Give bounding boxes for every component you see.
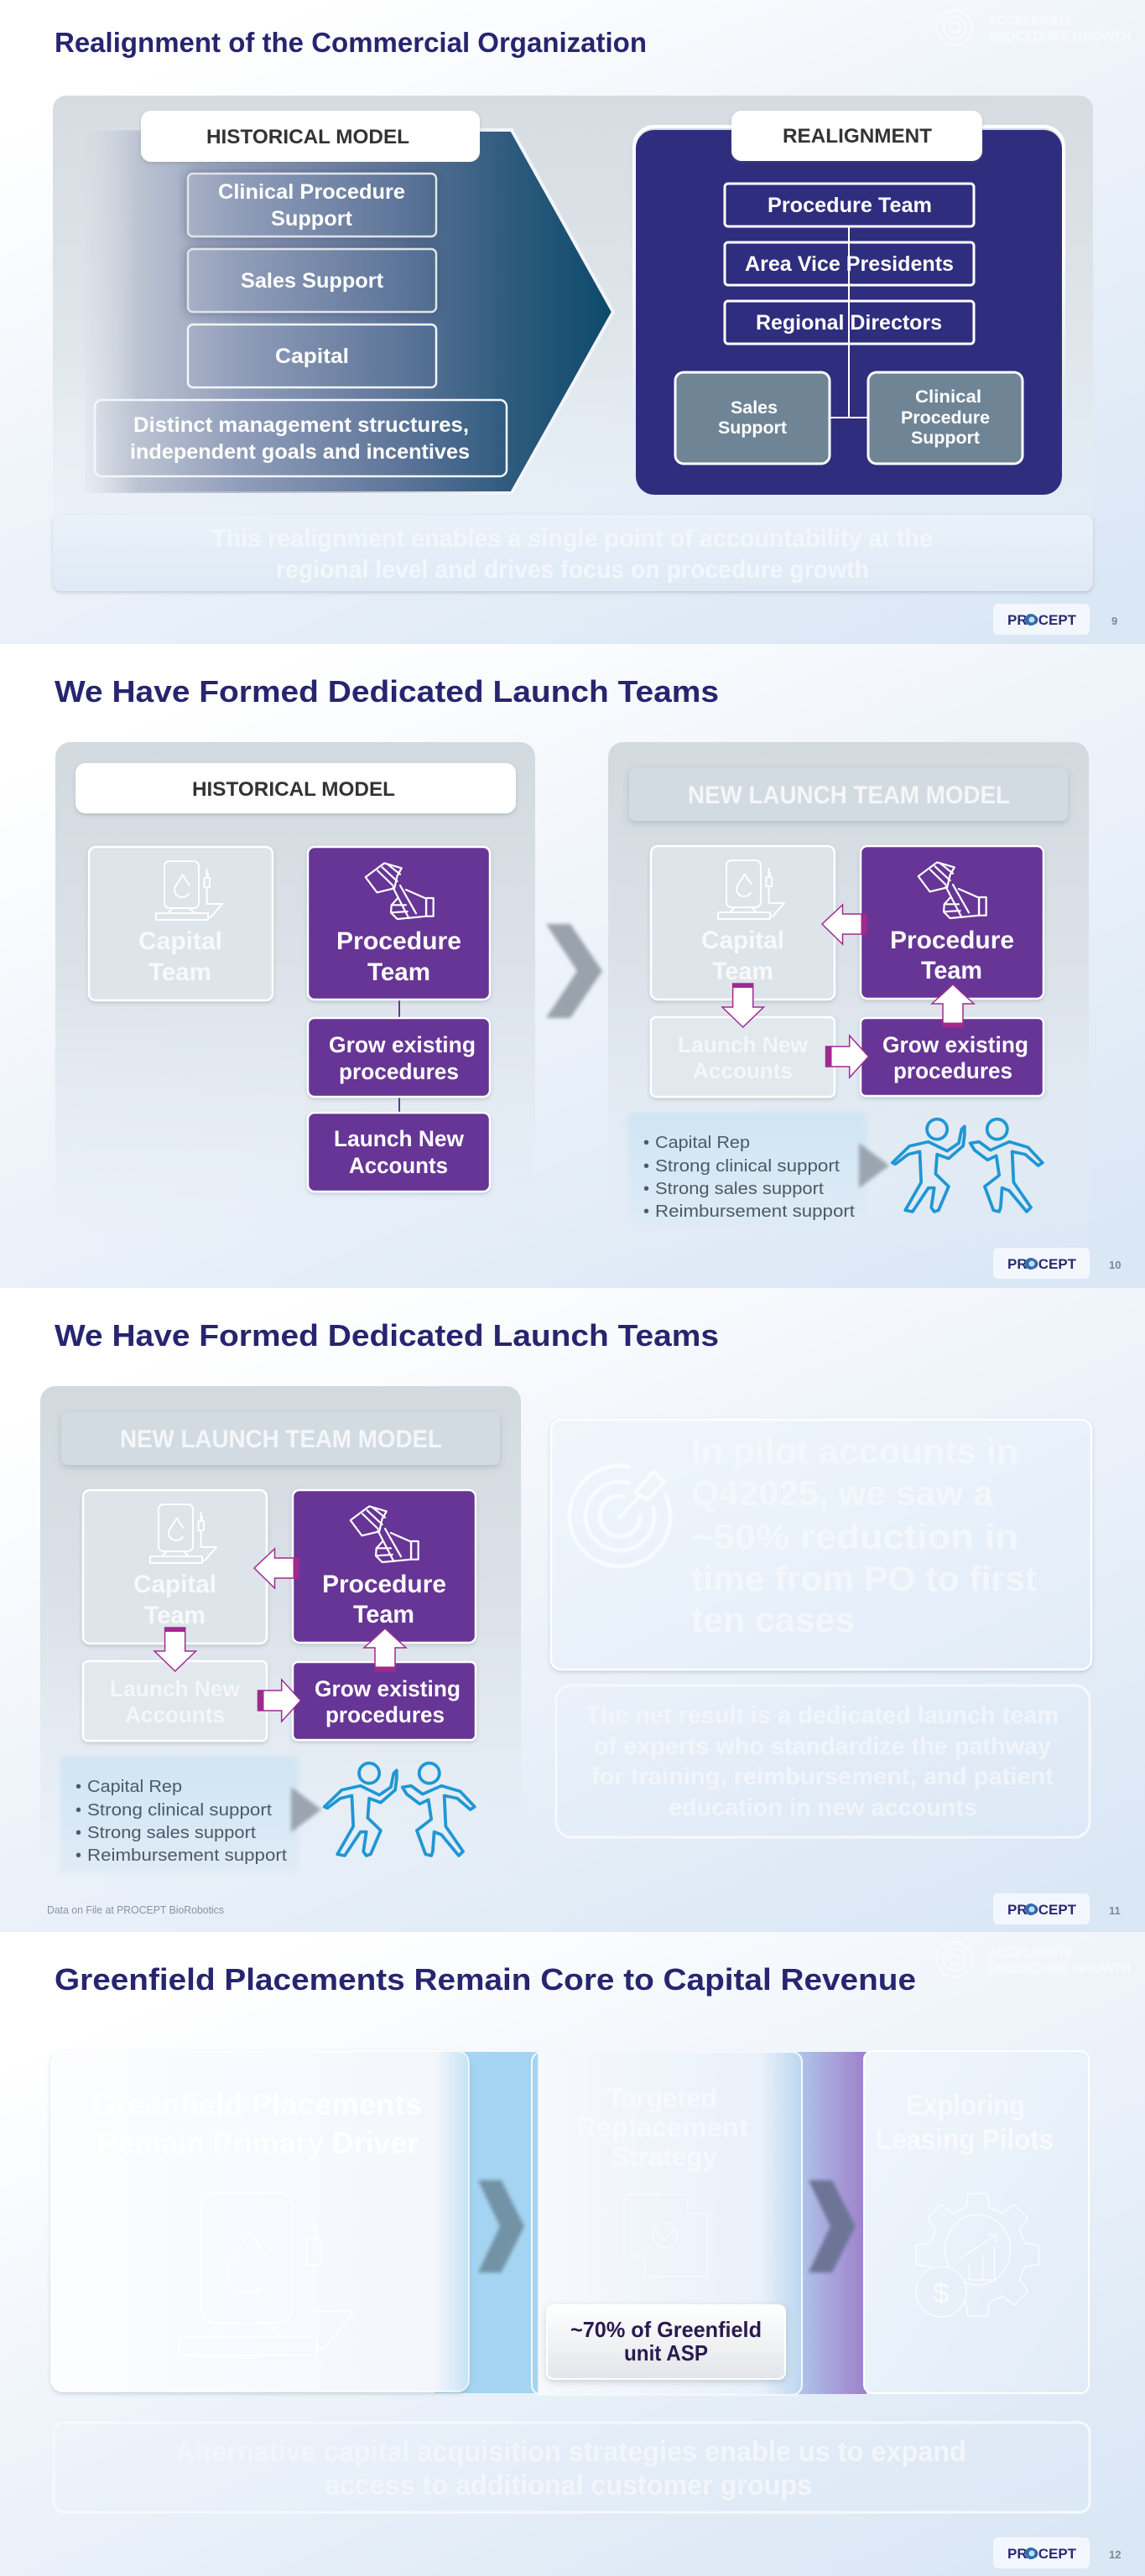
bullet list: launch team support: Strong clinical support	[87, 1801, 272, 1820]
title: We Have Formed Dedicated Launch Teams	[55, 674, 719, 709]
box: launch new accounts: Accounts	[125, 1702, 225, 1727]
icon: capital console large	[180, 2193, 355, 2355]
realignment label	[731, 111, 982, 161]
icon: hands gripping handle	[351, 1506, 419, 1562]
bullet list: launch team support: Capital Rep	[87, 1778, 182, 1796]
panel: net result statement: The net result is a dedicated launch team	[586, 1702, 1059, 1729]
page number: 10	[1109, 1259, 1121, 1271]
bullet list: launch team support	[643, 1134, 855, 1221]
bullet list: launch team support: •	[643, 1202, 649, 1221]
box: clinical procedure support: Clinical Procedure	[218, 180, 405, 204]
arrow: capital team to launch new accounts	[722, 984, 763, 1027]
new launch team model label: NEW LAUNCH TEAM MODEL	[688, 782, 1010, 809]
box: grow existing procedures: procedures	[325, 1702, 445, 1727]
card: exploring leasing pilots	[864, 2051, 1089, 2393]
box: capital team	[651, 846, 835, 1000]
box: clinical procedure support: Support	[271, 207, 353, 231]
icon: two people high five	[893, 1119, 1043, 1212]
team connectors	[398, 1000, 400, 1113]
footer logo: PROCEPT	[1007, 1902, 1077, 1918]
box: distinct management structures: Distinct management structures,	[133, 413, 469, 437]
title: We Have Formed Dedicated Launch Teams	[55, 1318, 719, 1353]
arrow: list to people	[859, 1143, 889, 1188]
box: capital team	[89, 847, 273, 1000]
box: capital team: Capital	[701, 927, 784, 954]
bullet list background	[60, 1757, 299, 1872]
box: regional directors: Regional Directors	[756, 311, 942, 335]
box: procedure team: Procedure	[336, 927, 461, 955]
icon: hands gripping handle	[366, 863, 434, 919]
callout: 70 percent of greenfield unit ASP: unit ASP	[624, 2340, 708, 2366]
box: launch new accounts	[83, 1661, 267, 1741]
accelerate procedure growth badge	[937, 1942, 1131, 1977]
box: capital team: Team	[144, 1602, 206, 1629]
arrow: chevron two	[809, 2180, 856, 2272]
footer logo: PROCEPT	[1007, 1256, 1077, 1272]
card: exploring leasing pilots: Leasing Pilots	[876, 2124, 1054, 2156]
card: exploring leasing pilots: Exploring	[906, 2090, 1025, 2122]
panel: pilot result: ten cases	[691, 1600, 855, 1639]
panel: pilot result	[551, 1420, 1091, 1670]
box: procedure team	[861, 846, 1044, 999]
title: Greenfield Placements Remain Core to Capital Revenue	[55, 1962, 916, 1997]
accelerate procedure growth badge: ACCELERATE	[988, 13, 1074, 29]
box: capital team: Capital	[138, 927, 222, 955]
bullet list: launch team support: •	[75, 1846, 81, 1865]
footer logo: PROCEPT	[1007, 612, 1077, 628]
box: launch new accounts: Launch New	[678, 1032, 809, 1057]
purple connector band	[793, 2052, 867, 2394]
arrow: launch new accounts to grow existing	[825, 1036, 869, 1078]
panel: net result statement: of experts who standardize the pathway	[594, 1733, 1051, 1760]
box: grow existing procedures: Grow existing	[882, 1032, 1028, 1057]
box: launch new accounts	[651, 1017, 835, 1097]
box: capital team: Team	[148, 958, 211, 986]
box: procedure team: Procedure	[322, 1571, 446, 1598]
box: launch new accounts: Accounts	[349, 1153, 448, 1178]
bullet list: launch team support: Strong clinical support	[655, 1157, 840, 1176]
box: sales support: Sales Support	[241, 269, 384, 293]
box: area vice presidents: Area Vice Presidents	[745, 252, 954, 276]
bullet list: launch team support: Strong sales support	[87, 1824, 256, 1842]
card: greenfield placements	[51, 2051, 469, 2392]
footnote: Data on File at PROCEPT BioRobotics	[47, 1903, 224, 1916]
box: launch new accounts: Launch New	[110, 1676, 241, 1701]
bullet list: launch team support: Reimbursement support	[655, 1202, 855, 1221]
footer logo	[993, 1248, 1090, 1279]
slide 3: dedicated launch teams results	[0, 1288, 1145, 1932]
arrow: launch new accounts to grow existing	[258, 1680, 300, 1722]
card: greenfield placements: Greenfield Placements	[91, 2087, 422, 2122]
box: procedure team	[725, 184, 974, 226]
arrow: procedure team to capital team	[822, 905, 867, 944]
callout: accountability statement	[53, 515, 1093, 591]
panel: realignment org chart	[634, 111, 1064, 495]
box: procedure team	[293, 1490, 476, 1643]
icon: two people high five	[325, 1763, 475, 1856]
panel: pilot result: Q42025, we saw a	[691, 1473, 994, 1513]
historical model label	[75, 763, 516, 813]
box: distinct management structures: independent goals and incentives	[130, 440, 470, 464]
icon: documents with check	[624, 2194, 707, 2277]
callout: alternative capital acquisition statement	[54, 2423, 1090, 2512]
icon: capital console	[156, 861, 222, 920]
panel: historical model	[55, 742, 535, 1254]
arrow: chevron between models	[546, 924, 602, 1018]
icon: target with arrow	[553, 1449, 687, 1583]
box: procedure team: Team	[367, 958, 430, 986]
box: launch new accounts: Launch New	[334, 1126, 465, 1151]
callout: alternative capital acquisition statement: access to additional customer groups	[325, 2470, 812, 2501]
bullet list: launch team support: •	[643, 1157, 649, 1176]
historical model label: HISTORICAL MODEL	[192, 778, 395, 801]
box: grow existing procedures: procedures	[339, 1059, 459, 1084]
accelerate procedure growth badge: ACCELERATE	[988, 1945, 1074, 1961]
box: capital: Capital	[275, 345, 349, 368]
card: targeted replacement strategy	[532, 2052, 802, 2395]
box: grow existing procedures: procedures	[893, 1058, 1012, 1083]
icon: hands gripping handle	[919, 862, 986, 918]
box: capital	[188, 325, 436, 387]
new launch team model label	[629, 768, 1068, 821]
panel: new launch team model	[608, 742, 1089, 1254]
panel: historical model arrow	[85, 111, 613, 493]
box: grow existing procedures: Grow existing	[315, 1676, 461, 1701]
box: distinct management structures	[95, 400, 507, 476]
icon: capital console	[150, 1504, 216, 1563]
box: sales support: Sales	[731, 398, 778, 418]
box: grow existing procedures	[861, 1018, 1044, 1096]
bullet list: launch team support: •	[643, 1180, 649, 1198]
arrow: capital team to launch new accounts	[154, 1628, 196, 1671]
panel: pilot result: ~50% reduction in	[691, 1517, 1018, 1556]
box: regional directors	[725, 301, 974, 344]
box: sales support	[188, 249, 436, 312]
box: capital team: Capital	[133, 1571, 216, 1598]
box: grow existing procedures	[293, 1662, 476, 1740]
box: capital team: Team	[712, 958, 773, 985]
org chart connector	[830, 226, 868, 418]
box: clinical procedure support	[868, 372, 1023, 464]
box: launch new accounts	[308, 1113, 490, 1192]
panel: new launch team model	[40, 1386, 521, 1898]
title: Realignment of the Commercial Organization	[55, 27, 647, 58]
new launch team model label: NEW LAUNCH TEAM MODEL	[120, 1426, 442, 1453]
accelerate procedure growth badge: PROCEDURE GROWTH	[988, 1961, 1131, 1976]
callout: accountability statement: regional level and drives focus on procedure growth	[276, 556, 869, 584]
bullet list: launch team support: •	[643, 1134, 649, 1152]
icon: gear with chart and dollar coin: $	[933, 2277, 950, 2309]
footer logo	[993, 1893, 1090, 1924]
panel: comparison background	[53, 96, 1093, 519]
slide 2: dedicated launch teams	[0, 644, 1145, 1288]
bullet list: launch team support	[75, 1778, 287, 1865]
box: procedure team	[308, 847, 490, 1000]
bullet list: launch team support: •	[75, 1824, 81, 1842]
footer logo	[993, 604, 1090, 635]
box: procedure team: Team	[921, 957, 982, 984]
box: procedure team: Team	[353, 1601, 414, 1628]
panel: net result statement: education in new accounts	[669, 1794, 977, 1821]
accelerate procedure growth badge: PROCEDURE GROWTH	[988, 29, 1131, 44]
box: area vice presidents	[725, 242, 974, 285]
callout: 70 percent of greenfield unit ASP: ~70% of Greenfield	[570, 2317, 762, 2342]
box: clinical procedure support	[188, 174, 436, 236]
callout: accountability statement: This realignment enables a single point of accountability at the	[211, 525, 933, 553]
box: clinical procedure support: Support	[911, 428, 980, 448]
arrow: chevron one	[478, 2180, 524, 2272]
realignment label: REALIGNMENT	[783, 125, 932, 148]
slide 4: greenfield placements	[0, 1932, 1145, 2576]
box: launch new accounts: Accounts	[693, 1058, 793, 1083]
box: grow existing procedures: Grow existing	[329, 1032, 476, 1057]
box: grow existing procedures	[308, 1018, 490, 1097]
box: procedure team: Procedure Team	[768, 194, 932, 217]
historical model label: HISTORICAL MODEL	[206, 126, 409, 148]
panel: pilot result: time from PO to first	[691, 1559, 1037, 1598]
panel: pilot result: In pilot accounts in	[691, 1431, 1018, 1471]
bullet list: launch team support: •	[75, 1778, 81, 1796]
icon: capital console	[718, 860, 784, 919]
callout: alternative capital acquisition statement: Alternative capital acquisition strategies enable us to expand	[175, 2436, 966, 2468]
icon: gear with chart and dollar coin	[916, 2194, 1039, 2317]
bullet list: launch team support: Strong sales support	[655, 1180, 824, 1198]
blue connector band	[435, 2052, 538, 2393]
bullet list background	[628, 1113, 867, 1228]
arrow: procedure team to capital team	[254, 1549, 299, 1588]
page number: 12	[1109, 2548, 1121, 2561]
page number: 9	[1111, 615, 1117, 627]
arrow: list to people	[291, 1787, 321, 1832]
card: targeted replacement strategy: Replacement	[576, 2112, 748, 2142]
bullet list: launch team support: Capital Rep	[655, 1134, 750, 1152]
arrow: grow existing to procedure team	[932, 984, 974, 1027]
box: clinical procedure support: Procedure	[901, 408, 990, 428]
box: clinical procedure support: Clinical	[915, 387, 981, 407]
bullet list: launch team support: •	[75, 1801, 81, 1820]
accelerate procedure growth badge	[937, 10, 1131, 45]
callout: 70 percent of greenfield unit ASP	[547, 2305, 785, 2379]
panel: net result statement: for training, reimbursement, and patient	[591, 1763, 1054, 1790]
box: capital team	[83, 1490, 267, 1644]
box: sales support	[675, 372, 830, 464]
panel: net result statement	[556, 1685, 1090, 1837]
footer logo	[993, 2537, 1090, 2568]
slide 1: realignment of the commercial organization	[0, 0, 1145, 644]
card: targeted replacement strategy: Targeted	[607, 2083, 717, 2113]
page number: 11	[1109, 1904, 1121, 1917]
arrow: grow existing to procedure team	[364, 1628, 406, 1671]
box: sales support: Support	[718, 418, 787, 438]
new launch team model label	[61, 1412, 500, 1465]
bullet list: launch team support: Reimbursement support	[87, 1846, 287, 1865]
box: procedure team: Procedure	[890, 927, 1014, 954]
historical model label	[141, 111, 480, 162]
card: targeted replacement strategy: Strategy	[612, 2142, 717, 2172]
footer logo: PROCEPT	[1007, 2546, 1077, 2562]
card: greenfield placements: Remain Primary Driver	[96, 2126, 419, 2160]
